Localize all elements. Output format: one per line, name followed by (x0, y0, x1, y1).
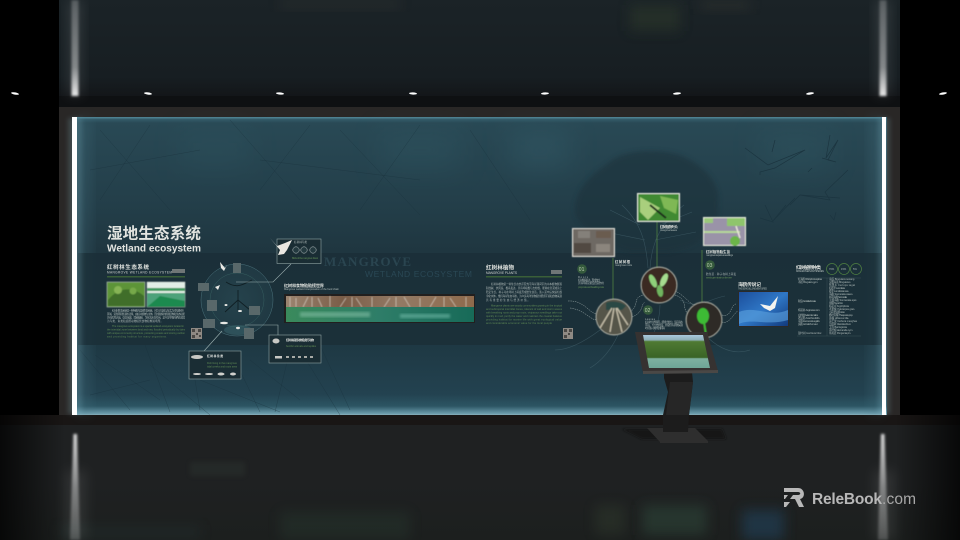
panel: mangrove species table: 老鼠簕 Acanthus ilicifo. (798, 316, 820, 320)
mangrove tree silhouette (555, 151, 750, 368)
birds sketch (745, 135, 848, 222)
number badge 01: 具有呼吸功能及稳固作用 (578, 281, 604, 285)
panel: mangrove species table: 水椰 Nypa fruti. (829, 301, 843, 305)
panel: mangrove ecosystem intro: 区域，受到周期性潮水浸淹，由红树植物为主体，形成独特的群落结构和生态功能 (107, 312, 185, 316)
panel: mangrove ecosystem intro: with unique community structure, protecting coasts and storing carbon (107, 331, 186, 335)
kiosk base (647, 428, 708, 443)
panel: mangrove species table: 15% (841, 267, 847, 271)
logo: ReleBook watermark: .com (882, 491, 916, 508)
section: food chain heading: Mangrove wetland interpretation of the food chain (284, 287, 340, 291)
number badge 02: Leaves (645, 317, 656, 321)
panel: mangrove species table (796, 264, 862, 336)
decorative band (78, 253, 882, 345)
callout: bird: Birds of the mangrove forest (292, 256, 318, 260)
kiosk stand (663, 372, 693, 432)
panel: mangrove species table: 5% (853, 267, 857, 271)
panel: mangrove species table: 红树植物种类 (796, 264, 821, 271)
panel: mangrove species table: 木榄 Bruguiera gym. (798, 280, 818, 284)
connecting green stems (613, 222, 702, 302)
panel: mangrove species table: 莲叶桐 Hernandia nym. (829, 328, 853, 332)
label: leaves: 红树植物叶片 (660, 224, 679, 229)
panel: mangrove species table: 木果楝 Xylocarpus gran. (829, 307, 855, 311)
callout: bird: 红树林鸟类 (294, 240, 307, 244)
panel: mangrove species table: 卤蕨 Acrostichum aur. (798, 322, 818, 326)
wall texture: sketched branches (80, 120, 530, 415)
panel: mangrove ecosystem intro: 红树林生态系统是一种特殊的湿地生态系统，它位于陆地与海洋之间的潮间带 (112, 308, 184, 312)
label: leaves (660, 224, 679, 232)
circular photo: roots (596, 299, 632, 335)
panel: mangrove plants text: providing habitat for marine life with great ecological value (486, 318, 563, 322)
panel: mangrove plants text: and subtropical intertidal zones, tolerant of salt and storm waves (486, 307, 563, 311)
watermark heading (324, 254, 472, 279)
panel: mangrove species table: 黄槿 Hibiscus tilia. (829, 316, 849, 320)
title: Wetland ecosystem (107, 242, 201, 254)
callout: fish (189, 331, 241, 379)
QR code: right (563, 328, 573, 339)
panel: mangrove species table: 海芒果 Cerbera manghas (829, 319, 858, 323)
panel: mangrove species table: 白骨壤 Avicennia marina (798, 313, 819, 317)
number badge 02: 红树叶片厚革质，能排出盐分，适应海水 (645, 320, 683, 324)
panel: mangrove species table: 杯萼海桑 Sonneratia (829, 295, 848, 299)
number badge 01: 红树根系发达，形成支柱 (578, 278, 600, 282)
number badge 02 (643, 305, 683, 330)
panel: mangrove species table: 瓶花木 Scyphiphora (829, 304, 850, 308)
photo: propagule (703, 217, 746, 246)
panel: mangrove plants text: 净化水体，维持海岸生态平衡，为众多海洋生物提供栖息环境和食物来源 (486, 294, 562, 298)
callout: benthic animals (245, 325, 321, 363)
watermark heading: WETLAND ECOSYSTEM (365, 269, 472, 279)
panel: mangrove species table: 海莲 Bruguiera sexang. (829, 277, 855, 281)
photo: mangrove roots (572, 228, 615, 257)
circular photo: leaves (641, 267, 677, 303)
dashed root links (568, 290, 740, 322)
panel: mangrove species table: MANGROVE PLANT SPECIES (796, 269, 824, 273)
number badge 01: prop roots and breathing roots (578, 285, 605, 289)
panel: mangrove species table: 榄李 Lumnitzera race. (829, 289, 849, 293)
number badge 03: 胎生苗 · 种子在树上萌发 (706, 272, 736, 276)
photo: coastal mangrove (147, 282, 185, 307)
title (107, 224, 201, 254)
number badge 03: seeds germinate on the tree (706, 276, 733, 280)
panel: mangrove species table: 角果木 Ceriops tagal (829, 283, 855, 287)
section: food chain heading: 红树林食物链链接世界 (284, 282, 325, 289)
panel: mangrove ecosystem intro: MANGROVE WETLAND ECOSYSTEM (107, 270, 172, 274)
callout: fish: Fish living in the mangrove (207, 361, 238, 365)
kiosk screen photo (643, 335, 710, 368)
panel: mangrove plants text: Mangrove plants are woody communities growing in the tropical (491, 304, 562, 308)
ceiling lamps (11, 92, 947, 95)
label: roots (615, 259, 633, 267)
panel: mangrove species table: 海桑 Sonneratia caseo. (829, 292, 853, 296)
callout: bird (236, 238, 321, 282)
wall spotlights (68, 0, 890, 96)
panel: mangrove plants text: 稳定生长，种子可在母树上萌发形成胎生幼苗，落入泥中后快速扎根 (486, 290, 562, 294)
number badge 02: 02 (645, 308, 651, 314)
number badge 01: Roots (578, 275, 589, 279)
panel: mangrove species table: 玉蕊 Barringtonia (829, 325, 848, 329)
panel: mangrove species table: 无瓣海桑 Sonneratia apet. (829, 298, 857, 302)
panel: mangrove species table: 红榄李 Lumnitzera (829, 286, 846, 290)
panel: mangrove plants text: 耐盐碱、抗风浪，根系发达，具有呼吸根与支柱根，能够在淤泥滩涂上 (486, 286, 562, 290)
heading and photo: seagull story: THE SEAGULLS ADVENTURES (738, 286, 767, 290)
panel: mangrove species table: 杨叶肖槿 Thespesia pop. (829, 313, 853, 317)
section: food chain heading (284, 282, 340, 291)
panel: mangrove ecosystem intro: 为鸟类、鱼类和底栖动物提供食物和繁殖场所。 (107, 319, 163, 323)
panel: mangrove species table: 水黄皮 Pongamia pin. (829, 331, 851, 335)
kiosk stand front (666, 382, 693, 415)
panel: mangrove plants text: quickly in mud, purify the water and maintain the coastal balance (486, 314, 563, 318)
photo: mangrove canopy (107, 282, 145, 307)
panel: mangrove plants text: 红树林植物是一种生长在热带亚热带海岸潮间带的木本植物群落 (491, 282, 562, 286)
panel: mangrove species table: 小花老鼠簕 Acan. (829, 310, 845, 314)
panel: mangrove plants text: with breathing roots and prop roots, viviparous seedlings take root (486, 310, 562, 314)
panel: mangrove plants text: 红树林植物 (486, 264, 514, 272)
light strips (68, 117, 890, 415)
panel: mangrove species table: 苦郎树 Clerodendrum (829, 322, 851, 326)
kiosk screen housing (635, 332, 718, 373)
label: roots: 红树树根 (615, 259, 631, 264)
label: propagule: 红树植物胎生苗 (706, 249, 731, 254)
callout: benthic animals: benthic animals and reptiles (286, 344, 317, 348)
panel: mangrove plants text (486, 264, 563, 325)
number badge 01 (577, 264, 605, 289)
callout: fish: tidal creeks and roots area (207, 364, 238, 368)
panel: mangrove plants text: MANGROVE PLANTS (486, 271, 517, 275)
label: propagule: mangrove viviparous seedlings (706, 253, 734, 257)
panel: mangrove species table: 秋茄 Kandelia obovata (798, 299, 817, 303)
panel: mangrove ecosystem intro: the intertidal zone between land and sea, flooded periodically by tides (107, 328, 186, 332)
panel: mangrove ecosystem intro: The mangrove ecosystem is a special wetland ecosystem located in (112, 324, 185, 328)
number badge 03: 03 (707, 263, 713, 269)
number badge 02: 环境，光合作用强，并提供有机物来源 (645, 323, 683, 327)
logo: ReleBook watermark: ReleBook (812, 491, 882, 508)
label: leaves: mangrove leaves (660, 228, 678, 232)
kiosk lower lip (643, 370, 718, 374)
panorama photo strip (284, 294, 475, 323)
panel: mangrove species table: 海漆 Excoecaria agallo. (798, 319, 820, 323)
panel: mangrove species table: 红海榄 Rhizophora stylosa (798, 277, 823, 281)
label: propagule (706, 249, 734, 257)
panel: mangrove ecosystem intro: 红树林生态系统 (107, 263, 149, 271)
photo: mangrove leaves (637, 193, 680, 222)
title: 湿地生态系统 (107, 224, 201, 242)
heading and photo: seagull story (738, 281, 789, 327)
callout: benthic animals: 红树林底栖动物及爬行动物 (286, 338, 314, 342)
interactive kiosk (622, 332, 726, 443)
watermark heading: MANGROVE (324, 254, 411, 269)
panel: mangrove species table: 银叶树 Heritiera littor. (798, 331, 822, 335)
logo: ReleBook watermark (784, 488, 916, 508)
circular photo: propagule (686, 302, 722, 338)
number badge 01: 01 (579, 267, 585, 273)
floor (0, 415, 960, 540)
callout: fish: 红树林鱼类 (207, 354, 223, 358)
kiosk floor shadow (622, 429, 726, 439)
food web circle diagram (198, 262, 273, 339)
panel: mangrove species table: 70% (829, 267, 835, 271)
panel: mangrove ecosystem intro: 具有防风消浪、促淤保滩、固碳储碳、净化海水等作用，是众多生物的栖息家园 (107, 316, 185, 320)
panel: mangrove ecosystem intro (107, 263, 186, 338)
number badge 03 (705, 260, 736, 280)
icon: R mark (784, 488, 804, 507)
label: roots: mangrove roots (615, 263, 633, 267)
heading and photo: seagull story: 海鸥传说记 (738, 281, 761, 288)
illuminated wall panel (72, 117, 887, 415)
display wall frame (59, 107, 900, 415)
panel: mangrove species table: 桐花树 Aegiceras corn. (798, 308, 820, 312)
QR code: left (191, 328, 202, 339)
panel: mangrove species table: 尖瓣海莲 Bruguiera s. (829, 280, 851, 284)
panel: mangrove plants text: 具有重要的生态与经济价值。 (486, 298, 530, 302)
panel: mangrove ecosystem intro: and providing habitat for many organisms. (107, 334, 167, 338)
number badge 02: 叶片落入水中形成碎屑 (645, 326, 665, 330)
panel: mangrove plants text: and considerable economic value for the local people (486, 321, 553, 325)
